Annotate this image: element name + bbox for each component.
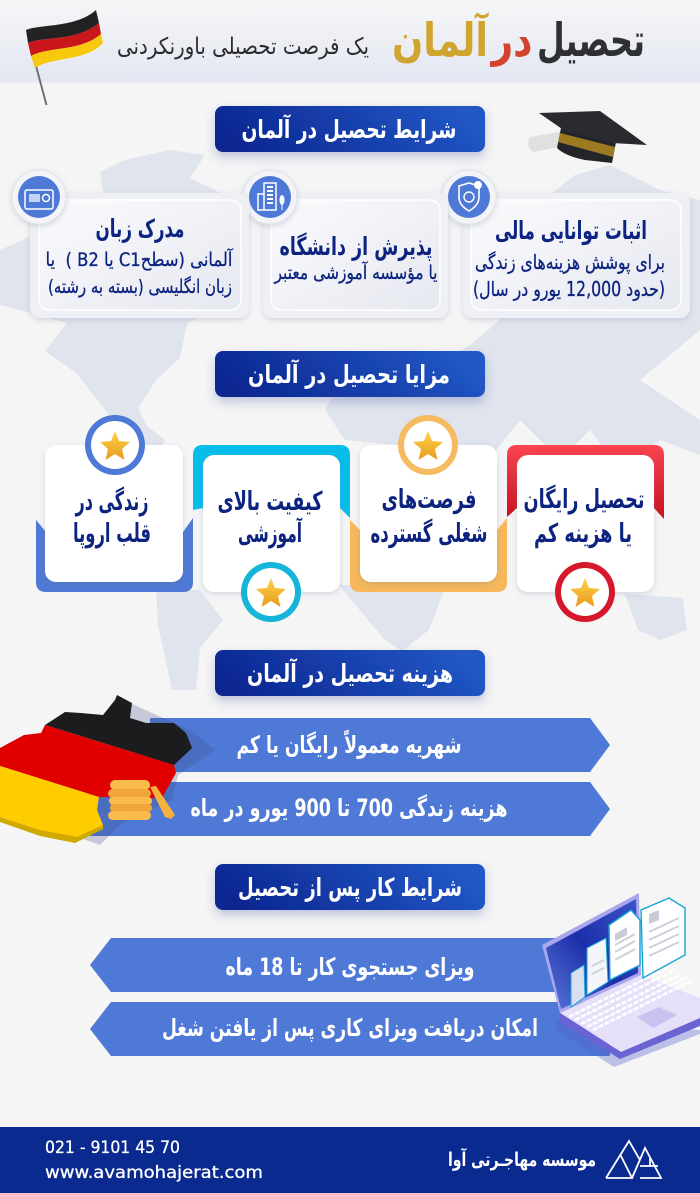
panel: education quality: [193, 445, 350, 622]
panel: language certificate: [12, 170, 249, 318]
heading: study conditions: شرایط تحصیل در آلمان: [242, 114, 456, 145]
contact phone: 021 - 9101 45 70: [45, 1138, 180, 1158]
icon: Germany map with flag colours: [0, 695, 215, 845]
panel: education quality: آموزشی: [238, 517, 303, 549]
panel: language certificate: مدرک زبان: [96, 214, 184, 243]
panel: university admission: یا مؤسسه آموزشی معتبر: [274, 260, 438, 284]
subtitle: یک فرصت تحصیلی باورنکردنی: [117, 34, 369, 60]
bar: tuition: [150, 718, 610, 772]
icon: building: [243, 170, 297, 224]
icon: orange star badge: [398, 415, 458, 475]
panel: education quality: کیفیت بالای: [218, 487, 323, 517]
title: در: [490, 13, 532, 67]
icon: laptop with documents: [542, 893, 700, 1067]
icon: blue star badge: [85, 415, 145, 475]
bar: work visa: امکان دریافت ویزای کاری پس از یافتن شغل: [162, 1014, 538, 1042]
bar: tuition: شهریه معمولاً رایگان یا کم: [236, 729, 462, 759]
panel: life in Europe: [36, 415, 193, 592]
icon: red star badge: [555, 562, 615, 622]
heading: costs: هزینه تحصیل در آلمان: [247, 658, 453, 689]
bar: living costs: [90, 782, 610, 836]
bar: job search visa: [90, 938, 570, 992]
panel: language certificate: زبان انگلیسی (بسته به رشته): [48, 275, 232, 298]
icon: cyan star badge: [241, 562, 301, 622]
heading: benefits: مزایا تحصیل در آلمان: [248, 359, 450, 390]
icon: certificate safe: [12, 170, 66, 224]
contact website: www.avamohajerat.com: [45, 1163, 263, 1183]
institute name: موسسه مهاجـرتی آوا: [448, 1147, 596, 1171]
panel: job opportunities: فرصت‌های: [382, 485, 476, 515]
panel: job opportunities: شغلی گسترده: [370, 518, 488, 549]
panel: life in Europe: زندگی در: [74, 486, 148, 517]
title: تحصیل: [537, 13, 645, 67]
title: [392, 12, 645, 67]
icon: German flag: [26, 10, 103, 105]
panel: university admission: [243, 170, 448, 318]
panel: financial proof: (حدود 12,000 یورو در سال): [473, 277, 665, 301]
panel: university admission: پذیرش از دانشگاه: [280, 232, 432, 262]
panel: free education: یا هزینه کم: [534, 519, 632, 549]
heading: costs: [215, 650, 485, 696]
heading: study conditions: [215, 106, 485, 152]
heading: post-study work: شرایط کار پس از تحصیل: [238, 873, 462, 903]
footer: [0, 1127, 700, 1193]
panel: financial proof: [442, 170, 690, 318]
panel: life in Europe: قلب اروپا: [73, 519, 151, 549]
icon: graduation cap: [528, 111, 647, 163]
icon: coins: [108, 780, 175, 820]
icon: shield badge: [442, 170, 496, 224]
panel: free education: تحصیل رایگان: [524, 484, 644, 515]
icon: logo: [606, 1141, 661, 1178]
world map background: [0, 150, 700, 690]
title: آلمان: [392, 12, 489, 67]
heading: post-study work: [215, 864, 485, 910]
bar: job search visa: ویزای جستجوی کار تا 18 ماه: [226, 953, 474, 981]
panel: job opportunities: [350, 415, 507, 592]
panel: language certificate: آلمانی (سطحC1 یا B2 ) یا: [46, 247, 233, 271]
heading: benefits: [215, 351, 485, 397]
header band: [0, 0, 700, 82]
bar: work visa: [90, 1002, 610, 1056]
bar: living costs: هزینه زندگی 700 تا 900 یورو در ماه: [190, 794, 507, 822]
panel: free education: [507, 445, 664, 622]
